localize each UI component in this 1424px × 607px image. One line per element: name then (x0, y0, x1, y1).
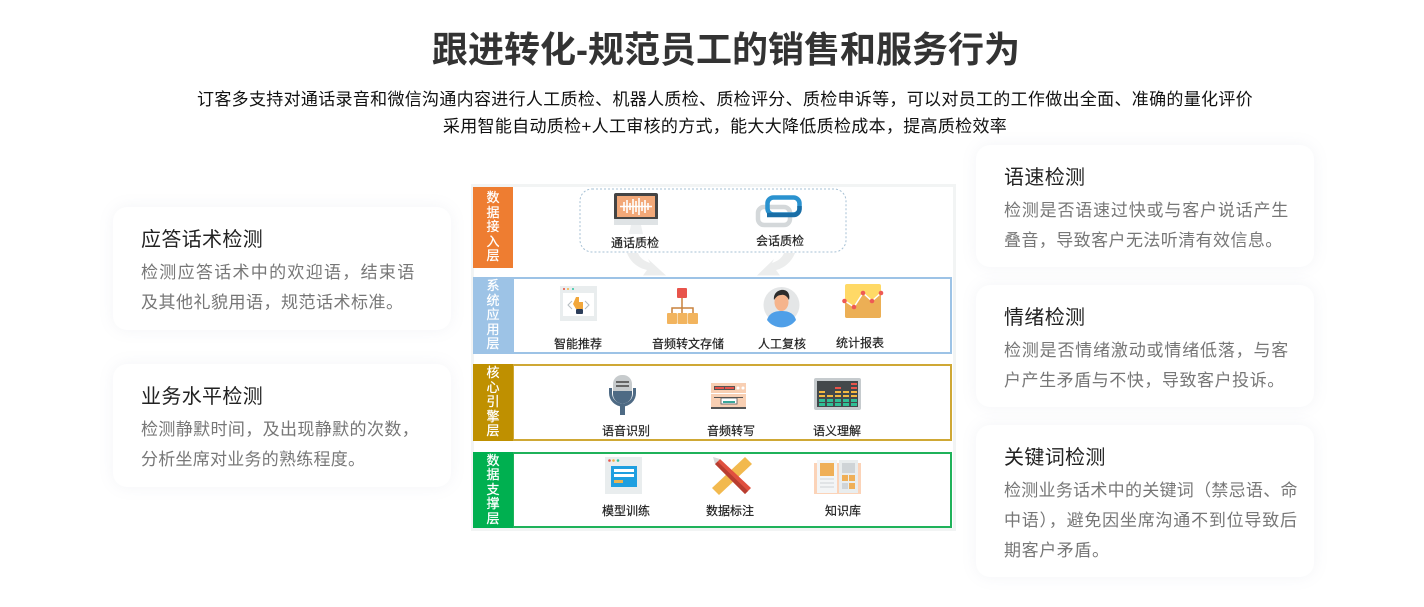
icon: open book (814, 460, 861, 494)
icon: ruler and pencil (712, 457, 752, 495)
card body: 检测应答话术中的欢迎语，结束语 (141, 263, 416, 282)
label: 语义理解 (813, 424, 861, 438)
panel: architecture diagram (471, 184, 956, 531)
card heading: 业务水平检测 (141, 386, 263, 408)
card body (1004, 481, 1298, 560)
icon: microphone (609, 375, 636, 415)
layer label: 数据接入层 (473, 187, 513, 268)
label: 会话质检 (756, 234, 804, 248)
subtitle line 2: 采用智能自动质检+人工审核的方式，能大大降低质检成本，提高质检效率 (443, 117, 1007, 136)
layer label: 数据接入层: 入 (486, 234, 500, 249)
layer label: 核心引擎层: 层 (486, 423, 500, 438)
layer box: 核心引擎层 (512, 364, 952, 441)
layer box: 系统应用层 (512, 277, 952, 354)
label: 智能推荐 (554, 337, 602, 351)
card body: 检测业务话术中的关键词（禁忌语、命 (1004, 481, 1298, 500)
layer label: 数据接入层: 接 (486, 219, 500, 234)
panel: 关键词检测 (976, 425, 1314, 577)
icon: browser pointer (560, 286, 597, 321)
icon: audio rack (711, 383, 746, 409)
layer label: 系统应用层: 层 (486, 336, 500, 351)
panel: 情绪检测 (976, 285, 1314, 407)
icon: chart report (842, 284, 884, 318)
card body (1004, 201, 1289, 250)
card body: 中语），避免因坐席沟通不到位导致后 (1004, 511, 1298, 530)
subtitle line 1: 订客多支持对通话录音和微信沟通内容进行人工质检、机器人质检、质检评分、质检申诉等，可以对员工的工作做出全面、准确的量化评价 (197, 90, 1253, 109)
card body: 检测是否语速过快或与客户说话产生 (1004, 201, 1289, 220)
card heading: 语速检测 (1004, 167, 1085, 189)
panel: 语速检测 (976, 145, 1314, 267)
layer label: 系统应用层: 用 (486, 322, 500, 337)
card body: 检测静默时间，及出现静默的次数， (141, 420, 419, 439)
card body: 叠音，导致客户无法听清有效信息。 (1004, 231, 1283, 250)
card body: 及其他礼貌用语，规范话术标准。 (141, 293, 404, 312)
icon: chain link (756, 195, 802, 228)
layer label: 数据接入层: 层 (486, 248, 500, 263)
label: 语音识别 (602, 424, 650, 438)
card body: 户产生矛盾与不快，导致客户投诉。 (1004, 371, 1285, 390)
card body (141, 420, 419, 469)
label: 数据标注 (706, 504, 754, 518)
card body: 期客户矛盾。 (1004, 541, 1110, 560)
icon: monitor waveform (614, 193, 658, 234)
layer label: 数据支撑层: 撑 (486, 496, 500, 511)
layer label: 系统应用层 (473, 277, 513, 354)
icon: equalizer (814, 378, 861, 410)
label: 人工复核 (758, 337, 806, 351)
card heading: 关键词检测 (1004, 447, 1106, 469)
label: 模型训练 (602, 504, 650, 518)
label: 统计报表 (836, 336, 884, 350)
panel: 业务水平检测 (113, 364, 451, 487)
layer label: 数据支撑层 (473, 452, 513, 528)
label: 知识库 (825, 504, 861, 518)
layer label: 核心引擎层: 擎 (486, 409, 500, 424)
layer label: 数据支撑层: 层 (486, 511, 500, 526)
layer label: 系统应用层: 应 (486, 307, 500, 322)
icon: hierarchy (667, 288, 698, 324)
card body (141, 263, 416, 312)
label: 音频转写 (707, 424, 755, 438)
card heading: 应答话术检测 (141, 229, 263, 251)
layer label: 数据接入层: 数 (486, 190, 500, 205)
layer label: 数据支撑层: 数 (486, 453, 500, 468)
panel: 应答话术检测 (113, 207, 451, 330)
icon: model window (605, 457, 642, 494)
layer label: 核心引擎层: 引 (486, 394, 500, 409)
title: 跟进转化-规范员工的销售和服务行为 (432, 29, 1020, 70)
card body: 检测是否情绪激动或情绪低落，与客 (1004, 341, 1289, 360)
layer label: 系统应用层: 统 (486, 293, 500, 308)
layer label: 核心引擎层 (473, 364, 513, 441)
layer label: 数据支撑层: 支 (486, 482, 500, 497)
layer label: 数据接入层: 据 (486, 205, 500, 220)
icon: person avatar (764, 287, 800, 328)
layer box: 数据支撑层 (512, 452, 952, 528)
card body (1004, 341, 1289, 390)
card body: 分析坐席对业务的熟练程度。 (141, 450, 365, 469)
label: 通话质检 (611, 236, 659, 250)
card heading: 情绪检测 (1004, 307, 1085, 329)
label: 音频转文存储 (652, 337, 724, 351)
layer label: 核心引擎层: 核 (486, 365, 500, 380)
layer label: 数据支撑层: 据 (486, 467, 500, 482)
layer label: 系统应用层: 系 (486, 278, 500, 293)
layer label: 核心引擎层: 心 (486, 380, 500, 395)
